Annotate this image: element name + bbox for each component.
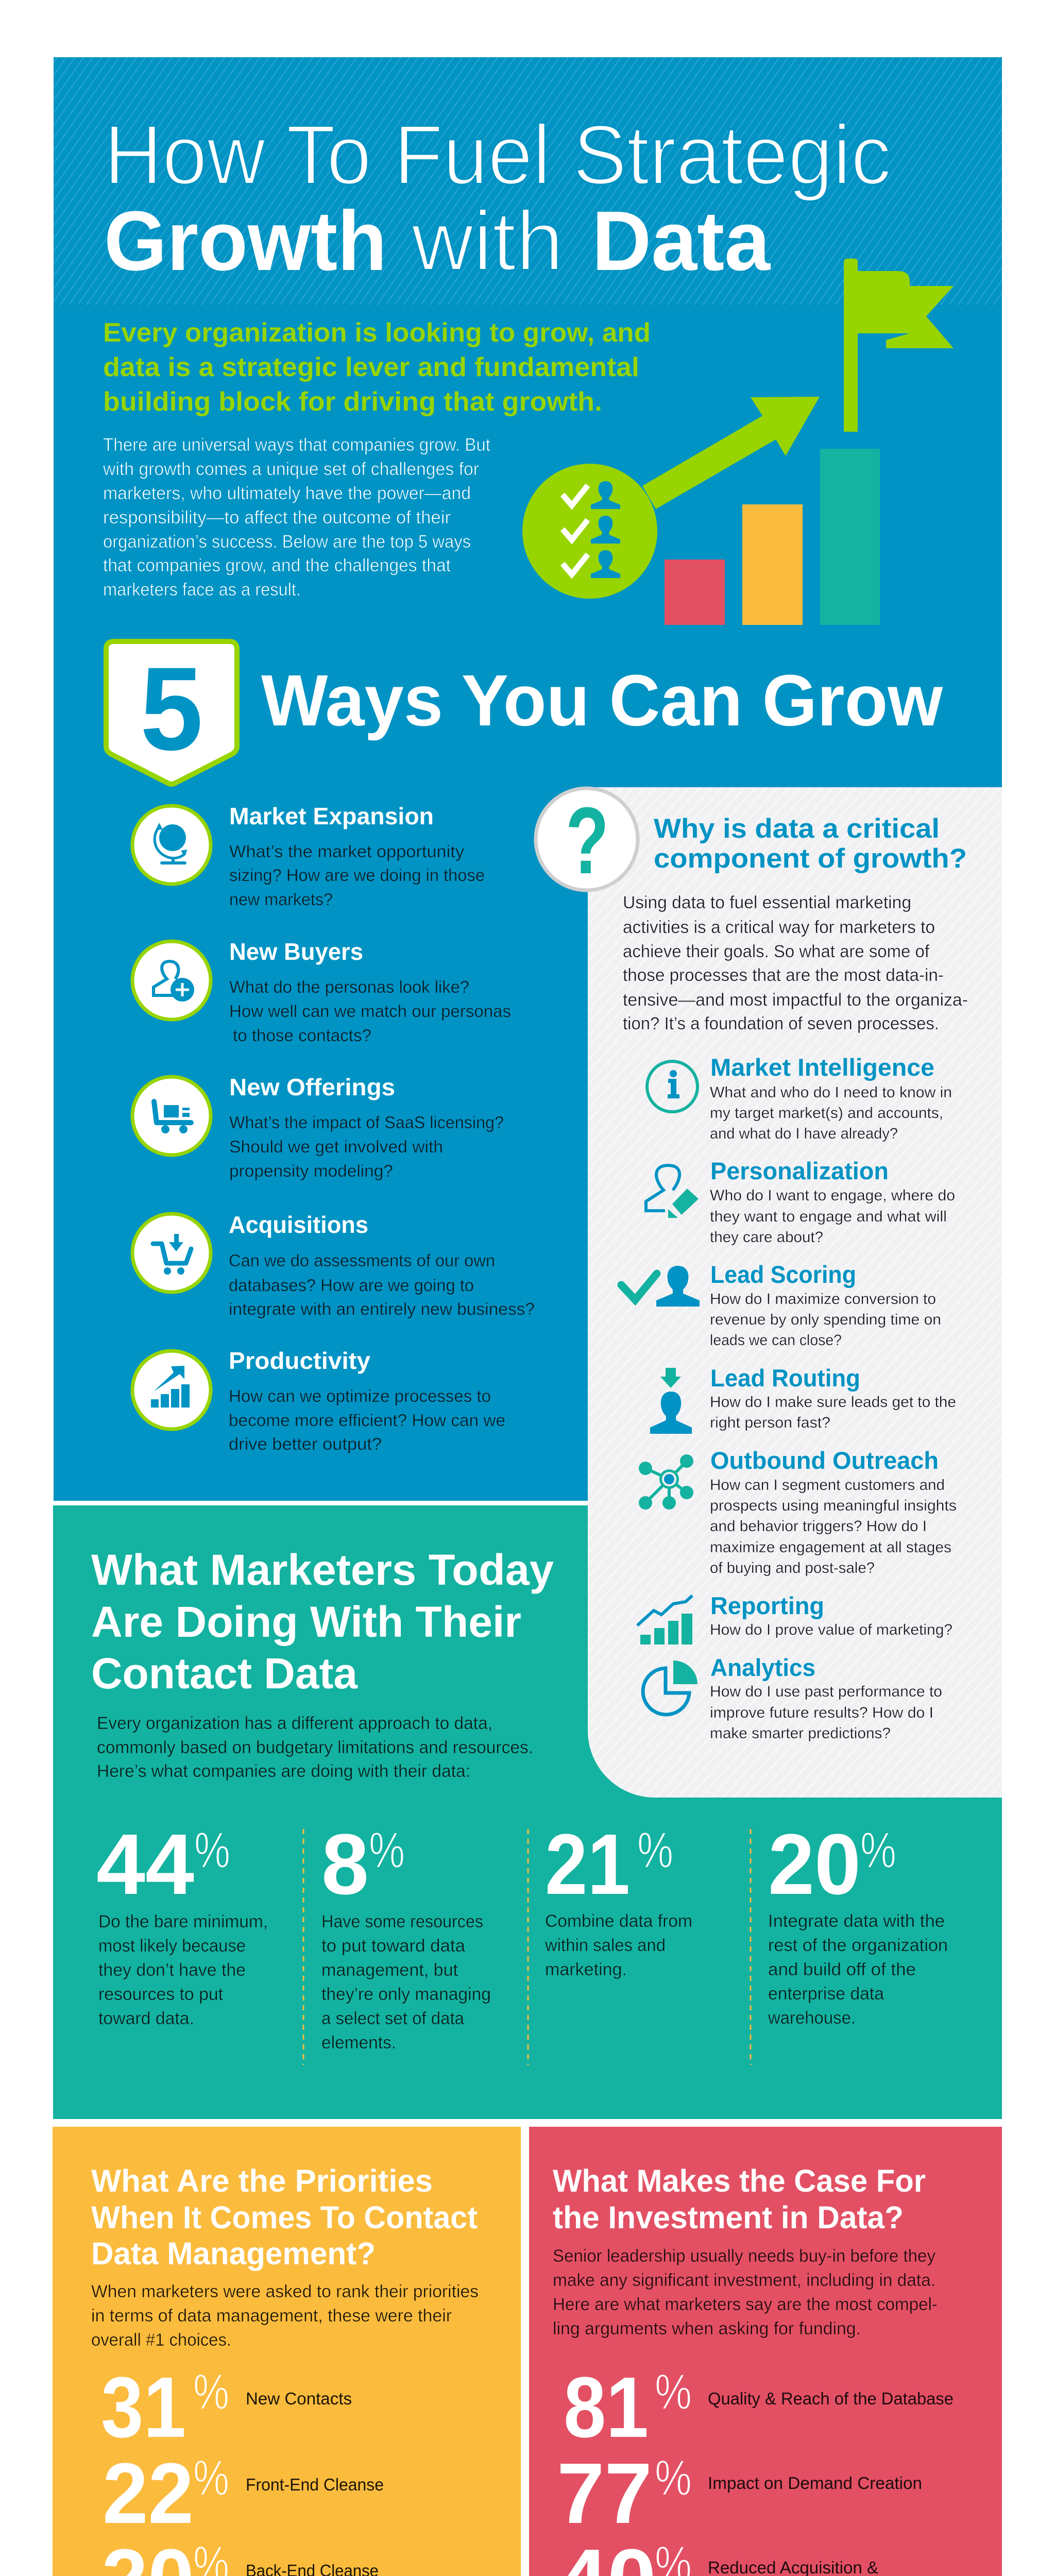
process text [710,1683,942,1742]
process text [710,1291,941,1349]
priorities intro text: When marketers were asked to rank their priorities [91,2282,479,2301]
stat: 44 percent: toward data. [98,2009,194,2028]
stat: 22 percent front-end cleanse [103,2446,384,2541]
stat: 8 percent: 8 [321,1817,369,1912]
investment intro text: make any significant investment, including in data. [553,2270,935,2290]
process text: of buying and post-sale? [710,1560,875,1577]
lead statement: Every organization is looking to grow, and [103,318,651,348]
stat: 20 percent: 20 [768,1817,861,1912]
item text: sizing? How are we doing in those [229,866,485,885]
item text: How can we optimize processes to [229,1386,491,1405]
process: personalization [646,1157,955,1246]
title [104,108,891,288]
priorities intro text: overall #1 choices. [91,2330,231,2350]
item text: What’s the market opportunity [229,842,465,861]
stat: 44 percent [96,1817,268,2028]
contact data intro text [97,1714,533,1781]
stat: 8 percent: they’re only managing [321,1985,491,2004]
icon: add person [132,941,211,1020]
why data intro text: Using data to fuel essential marketing [623,893,911,912]
stat: 31 percent new contacts: New Contacts [246,2389,352,2408]
item title: New Buyers [229,938,363,965]
lead statement: data is a strategic lever and fundamental [103,352,639,382]
stat: 20 percent: enterprise data [768,1984,884,2004]
process title: Market Intelligence [710,1054,934,1081]
heading: priorities [91,2163,478,2271]
item text: What’s the impact of SaaS licensing? [229,1113,504,1132]
why data intro text: those processes that are the most data-in- [623,965,944,985]
process: lead routing [650,1364,956,1434]
heading: case for investment: the Investment in Data? [553,2200,904,2235]
process title: Lead Scoring [710,1261,856,1288]
stat: 31 percent new contacts: 31 [101,2360,186,2455]
process text: improve future results? How do I [710,1704,933,1721]
process: market intelligence [647,1054,952,1142]
stat: 31 percent new contacts: % [193,2364,229,2420]
stat: 77 percent impact on demand: % [655,2450,692,2506]
icon: pie chart [643,1660,697,1715]
icon: growth illustration with flag, arrow, bars and contacts [522,259,954,625]
investment intro text: Senior leadership usually needs buy-in before they [553,2246,935,2266]
stat: 8 percent: elements. [321,2033,396,2053]
icon: question mark badge [536,787,638,893]
item text: to those contacts? [233,1026,371,1045]
item title: New Offerings [229,1074,395,1100]
item text: Should we get involved with [229,1137,443,1156]
process text: How do I prove value of marketing? [710,1621,952,1638]
investment intro text [553,2246,938,2338]
stat: 20 percent: rest of the organization [768,1936,948,1955]
process text: How can I segment customers and [710,1477,945,1494]
intro body text: organization’s success. Below are the top 5 ways [103,532,471,552]
process text: my target market(s) and accounts, [710,1105,943,1122]
heading: priorities: What Are the Priorities [91,2163,433,2198]
process text: they want to engage and what will [710,1208,947,1225]
heading: case for investment: What Makes the Case For [553,2163,926,2198]
process: lead scoring [621,1261,941,1349]
icon: number 5 badge [106,641,237,784]
process text [710,1084,952,1142]
stat: 44 percent: most likely because [98,1936,246,1956]
icon: check and person [621,1266,700,1307]
icon: bars with trend line [637,1596,692,1645]
item text: How well can we match our personas [229,1002,511,1021]
why data intro text: activities is a critical way for marketers to [623,918,935,937]
panel: case for investment [529,2127,1002,2576]
item text: databases? How are we going to [229,1276,474,1295]
stat: 21 percent: 21 [545,1817,630,1912]
heading: why is data a critical component of growth [654,814,967,874]
intro body text: marketers, who ultimately have the power—and [103,483,471,503]
title: with [411,194,564,288]
process text: prospects using meaningful insights [710,1497,957,1514]
icon: person with pencil [646,1165,699,1218]
panel: what marketers today are doing background [53,1505,1002,2119]
process text [710,1477,957,1577]
process text: make smarter predictions? [710,1725,891,1742]
process title: Personalization [710,1157,889,1184]
item text: new markets? [229,890,333,909]
stat: 20 percent: % [860,1822,896,1878]
item text: Can we do assessments of our own [229,1251,495,1270]
item: market expansion [132,803,485,909]
icon: question mark badge: ? [566,787,609,893]
heading: ways you can grow: Ways You Can Grow [261,659,943,741]
intro body text: responsibility—to affect the outcome of their [103,507,451,528]
stat: 8 percent: % [369,1822,405,1878]
stat: 20 percent: Integrate data with the [768,1911,945,1931]
icon: rising chart [132,1351,211,1429]
stat: 44 percent: resources to put [98,1985,224,2004]
heading: what marketers today are doing: Are Doing With Their [91,1598,521,1646]
lead statement [103,318,651,417]
process text: they care about? [710,1229,823,1246]
item text [229,842,485,909]
intro body text: marketers face as a result. [103,580,301,600]
stat: 8 percent: to put toward data [321,1936,465,1956]
icon: info [647,1061,697,1112]
stat: 44 percent: % [194,1822,230,1878]
process text: How do I maximize conversion to [710,1291,936,1308]
item: acquisitions [132,1211,535,1318]
heading: what marketers today are doing: What Marketers Today [91,1546,554,1594]
stat: 21 percent: Combine data from [545,1911,692,1931]
stat: 22 percent front-end cleanse: Front-End Cleanse [246,2475,384,2494]
intro body text: that companies grow, and the challenges that [103,555,451,575]
item text: integrate with an entirely new business? [229,1299,535,1318]
item text [229,977,511,1045]
contact data intro text: Every organization has a different approach to data, [97,1714,492,1733]
process text: Who do I want to engage, where do [710,1187,955,1204]
process text: How do I make sure leads get to the [710,1394,956,1411]
heading: priorities: Data Management? [91,2236,376,2271]
process title: Outbound Outreach [710,1447,939,1474]
item text: propensity modeling? [229,1161,393,1180]
stat: 21 percent [544,1817,692,1979]
process: analytics [643,1654,942,1742]
heading: priorities: When It Comes To Contact [91,2200,478,2235]
process text: and what do I have already? [710,1125,898,1142]
stat: 8 percent: Have some resources [321,1912,483,1931]
stat: 22 percent front-end cleanse: 22 [103,2446,194,2541]
stat: 44 percent: 44 [96,1817,194,1912]
stat: 81 percent quality and reach [564,2360,954,2455]
process text [710,1394,956,1431]
priorities intro text: in terms of data management, these were their [91,2306,452,2326]
process title: Lead Routing [710,1364,860,1392]
title: Data [592,194,771,288]
stat: 8 percent [321,1817,491,2053]
process title: Analytics [710,1654,815,1681]
lead statement: building block for driving that growth. [103,387,602,417]
heading: why is data a critical component of growth: Why is data a critical [654,814,940,844]
stat: 21 percent: marketing. [545,1960,627,1979]
icon: arrow down to person [650,1368,692,1434]
panel: why is data critical background [588,787,1002,1798]
item text [229,1386,505,1453]
stat: 22 percent front-end cleanse: % [193,2450,229,2506]
contact data intro text: commonly based on budgetary limitations and resources. [97,1738,533,1757]
investment intro text: ling arguments when asking for funding. [553,2319,861,2338]
stat: 20 percent back-end cleanse [101,2532,379,2576]
panel: priorities [53,2127,521,2576]
intro body text [103,435,490,600]
why data intro text: tensive—and most impactful to the organiza- [623,990,968,1010]
item text: drive better output? [229,1434,382,1453]
item title: Productivity [229,1347,370,1374]
icon: number 5 badge: 5 [140,642,203,775]
title: Growth [104,194,387,288]
hatched title band [54,57,1002,305]
process text: revenue by only spending time on [710,1311,941,1328]
stat: 77 percent impact on demand [557,2446,922,2541]
stat: 21 percent: within sales and [544,1936,666,1955]
item text: become more efficient? How can we [229,1411,505,1430]
stat: 77 percent impact on demand: Impact on Demand Creation [708,2473,922,2493]
stat: 81 percent quality and reach: % [655,2364,692,2420]
process text: What and who do I need to know in [710,1084,952,1101]
process title: Reporting [710,1592,824,1619]
title: How To Fuel Strategic [104,108,891,202]
stat: 8 percent: a select set of data [321,2009,464,2028]
investment intro text: Here are what marketers say are the most compel- [553,2295,938,2314]
item title: Market Expansion [229,803,434,829]
stat: 8 percent: management, but [321,1960,458,1980]
process text: leads we can close? [710,1332,842,1349]
item title: Acquisitions [229,1211,368,1238]
intro body text: There are universal ways that companies grow. But [103,435,490,455]
process text [710,1187,955,1246]
item: new buyers [132,938,511,1045]
icon: hub network [639,1454,693,1510]
why data intro text [623,893,968,1033]
icon: cart with boxes [132,1077,211,1155]
process: reporting [637,1592,952,1645]
stat: 20 percent: and build off of the [768,1960,916,1979]
stat: 31 percent new contacts [101,2360,352,2455]
process text: right person fast? [710,1414,830,1431]
stat: 44 percent: Do the bare minimum, [98,1912,268,1931]
stat: 81 percent quality and reach: Quality & Reach of the Database [708,2389,954,2408]
process text: maximize engagement at all stages [710,1539,951,1556]
priorities intro text [91,2282,479,2350]
item text: What do the personas look like? [229,977,469,996]
why data intro text: achieve their goals. So what are some of [623,942,930,961]
stat: 44 percent: they don’t have the [98,1960,246,1980]
stat: 20 percent [768,1817,948,2028]
heading: what marketers today are doing: Contact Data [91,1649,358,1698]
process text: How do I use past performance to [710,1683,942,1700]
intro body text: with growth comes a unique set of challenges for [103,459,479,479]
item: productivity [132,1347,505,1453]
panel: intro and five ways background [54,57,1002,1501]
contact data intro text: Here’s what companies are doing with their data: [97,1761,470,1781]
item: new offerings [132,1074,504,1180]
item text [229,1113,504,1180]
item text [229,1251,535,1318]
stat: 40 percent reduced costs [558,2532,878,2576]
why data intro text: tion? It’s a foundation of seven processes. [623,1014,939,1033]
heading: what marketers today are doing [91,1546,554,1698]
heading: why is data a critical component of growth: component of growth? [654,843,967,874]
stat: 81 percent quality and reach: 81 [564,2360,649,2455]
process: outbound outreach [639,1447,957,1577]
stat: 21 percent: % [637,1822,673,1878]
icon: cart with arrow [132,1214,211,1292]
heading: case for investment [553,2163,926,2235]
stat: 77 percent impact on demand: 77 [557,2446,652,2541]
process text: and behavior triggers? How do I [710,1518,927,1535]
icon: globe [132,806,211,884]
stat: 20 percent: warehouse. [768,2008,856,2028]
